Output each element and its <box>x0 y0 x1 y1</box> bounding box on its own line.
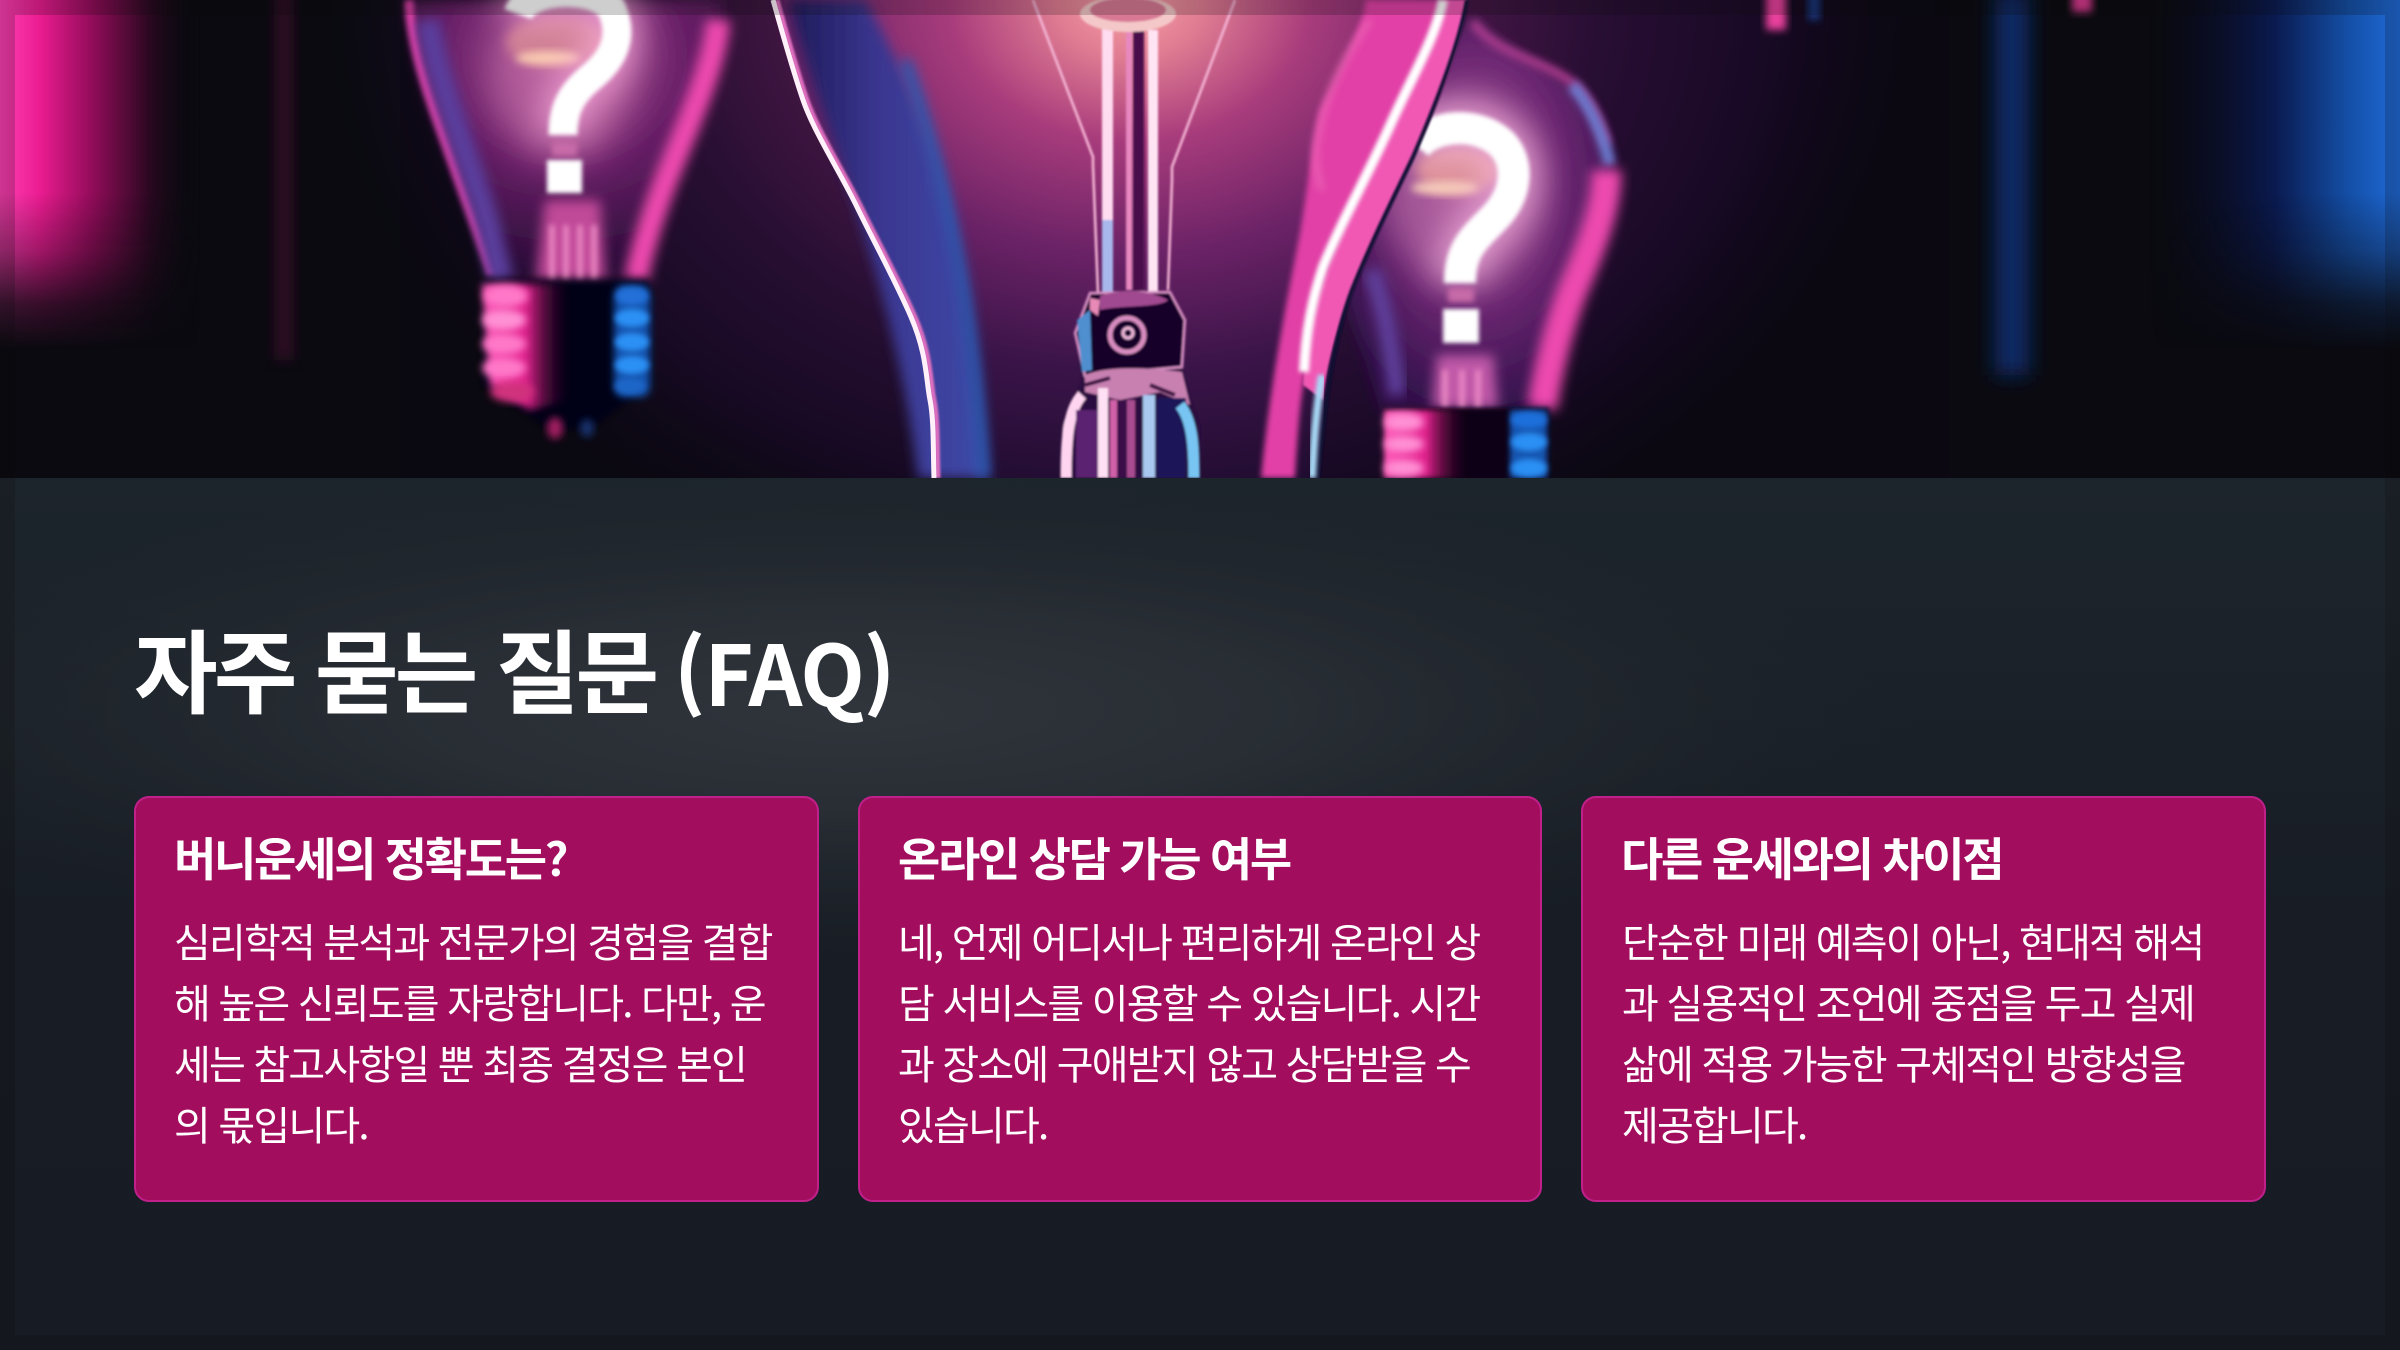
text block: card 2: 네, 언제 어디서나 편리하게 온라인 상 <box>898 910 1479 968</box>
text block: card 1 <box>174 910 772 1152</box>
icon: center filament stem <box>1033 0 1235 478</box>
icon: center large bulb glass <box>773 0 1467 478</box>
heading: card 1: 버니운세의 정확도는? <box>174 824 566 890</box>
icon: left question bulb <box>407 0 723 439</box>
text block: card 3 <box>1622 910 2203 1152</box>
text block: card 2: 담 서비스를 이용할 수 있습니다. 시간 <box>898 972 1479 1030</box>
text block: card 1: 세는 참고사항일 뿐 최종 결정은 본인 <box>174 1033 746 1091</box>
text block: card 3: 단순한 미래 예측이 아닌, 현대적 해석 <box>1622 910 2203 968</box>
text block: card 2 <box>898 910 1480 1152</box>
text block: card 3: 제공합니다. <box>1622 1094 1806 1152</box>
icon: right question bulb <box>1340 15 1612 480</box>
title: 자주 묻는 질문 (FAQ) <box>134 601 894 733</box>
panel: card 3 <box>1581 796 2266 1202</box>
panel: card 2 <box>858 796 1542 1202</box>
heading: card 3: 다른 운세와의 차이점 <box>1621 824 2002 890</box>
hero image: glowing question mark light bulbs <box>0 0 2400 478</box>
text block: card 3: 과 실용적인 조언에 중점을 두고 실제 <box>1622 972 2194 1030</box>
text block: card 1: 의 몫입니다. <box>174 1094 368 1152</box>
text block: card 2: 있습니다. <box>898 1094 1047 1152</box>
text block: card 1: 해 높은 신뢰도를 자랑합니다. 다만, 운 <box>174 972 765 1030</box>
heading: card 2: 온라인 상담 가능 여부 <box>898 824 1290 890</box>
text block: card 3: 삶에 적용 가능한 구체적인 방향성을 <box>1622 1033 2185 1091</box>
text block: card 2: 과 장소에 구애받지 않고 상담받을 수 <box>898 1033 1470 1091</box>
panel: dark background with smoke <box>15 478 2385 894</box>
panel: card 1 <box>134 796 819 1202</box>
text block: card 1: 심리학적 분석과 전문가의 경험을 결합 <box>174 910 772 968</box>
